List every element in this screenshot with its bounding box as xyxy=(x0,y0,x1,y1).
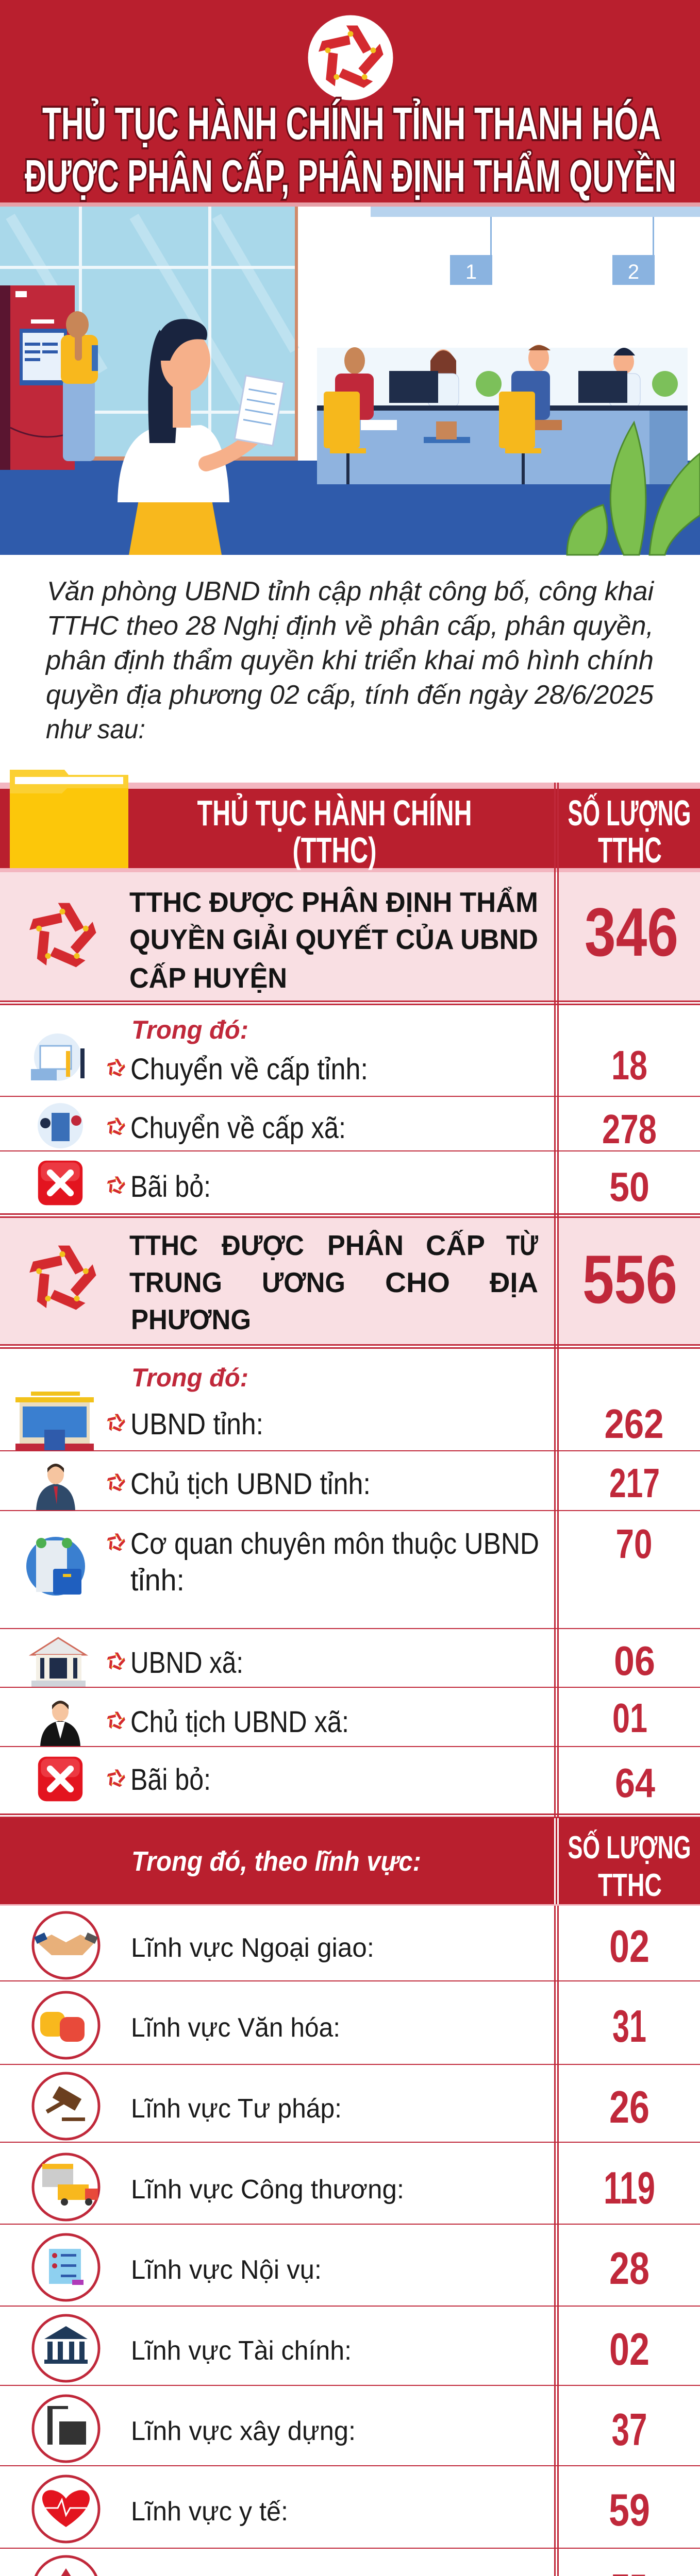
icon: recycle xyxy=(42,2568,90,2576)
panel: sub-rows of 556: UBND xã: xyxy=(130,1646,243,1680)
panel: sub-rows of 556: Chủ tịch UBND tỉnh: xyxy=(130,1467,371,1501)
row: Khoa học và Công nghệ xyxy=(42,2565,647,2576)
row: Văn hóa: Lĩnh vực Văn hóa: xyxy=(131,2013,340,2043)
illustration: public service office xyxy=(0,207,700,555)
panel: sub-rows of 556: 64 xyxy=(615,1760,655,1806)
panel: row 346 xyxy=(0,872,700,1001)
icon: gavel xyxy=(46,2086,85,2121)
icon: construction xyxy=(47,2406,86,2445)
icon: chairman xyxy=(36,1464,75,1511)
table header xyxy=(0,770,700,872)
intro paragraph: Văn phòng UBND tỉnh cập nhật công bố, công khai xyxy=(47,577,654,606)
heading: CẤP xyxy=(426,1229,485,1261)
panel: sub-rows of 346 xyxy=(0,1015,700,1210)
panel: sub-rows of 556: 262 xyxy=(604,1401,664,1447)
icon: heart xyxy=(42,2490,90,2527)
icon: commune chairman xyxy=(40,1701,80,1747)
vertical divider xyxy=(554,783,559,2576)
heading: TTHC ĐƯỢC PHÂN ĐỊNH THẨM xyxy=(129,886,538,918)
plant xyxy=(567,422,700,555)
heading: ĐƯỢC xyxy=(222,1229,304,1261)
row: Ngoại giao xyxy=(34,1921,649,1972)
header banner xyxy=(0,0,700,207)
counter signs: 2 xyxy=(628,261,639,283)
row: Nội vụ: Lĩnh vực Nội vụ: xyxy=(131,2255,322,2285)
heading xyxy=(129,886,538,994)
panel: sub-rows of 556: 06 xyxy=(614,1638,655,1684)
row: Tài chính: Lĩnh vực Tài chính: xyxy=(131,2336,352,2366)
panel: sub-rows of 346: 278 xyxy=(602,1106,657,1152)
panel: sub-rows of 346: Bãi bỏ: xyxy=(130,1170,211,1204)
panel: sub-rows of 556 xyxy=(0,1363,700,1806)
row: Tư pháp xyxy=(46,2081,649,2132)
intro paragraph: TTHC theo 28 Nghị định về phân cấp, phân quyền, xyxy=(47,611,654,641)
panel: sub-rows of 346: Chuyển về cấp xã: xyxy=(130,1111,346,1145)
header label: THỦ TỤC HÀNH CHÍNH xyxy=(197,792,472,833)
row: y tế xyxy=(42,2484,650,2535)
icon: provincial building xyxy=(15,1392,94,1451)
row: Tư pháp: 26 xyxy=(609,2081,649,2132)
row: Công thương: 119 xyxy=(604,2162,655,2213)
ATM xyxy=(0,285,75,470)
row: Ngoại giao: Lĩnh vực Ngoại giao: xyxy=(131,1933,374,1963)
icon: office workers xyxy=(38,1103,83,1148)
icon: people documents xyxy=(31,1033,85,1081)
icon: commune building xyxy=(31,1638,86,1687)
section header: by field xyxy=(0,1818,700,1906)
row: Văn hóa: 31 xyxy=(612,2001,646,2052)
header label: (TTHC) xyxy=(293,830,376,870)
heading xyxy=(129,1229,538,1335)
row: y tế: 59 xyxy=(609,2484,650,2535)
panel: sub-rows of 346: Chuyển về cấp tỉnh: xyxy=(130,1053,368,1086)
panel: sub-rows of 556: Trong đó: xyxy=(131,1363,248,1392)
panel: sub-rows of 346: Trong đó: xyxy=(131,1015,248,1044)
header label xyxy=(197,792,472,870)
section header: by field: TTHC xyxy=(598,1868,662,1903)
heading: TTHC xyxy=(129,1229,198,1261)
row: xây dựng: 37 xyxy=(611,2404,647,2455)
icon: logo xyxy=(25,903,101,976)
header count label xyxy=(568,792,691,870)
logo circle xyxy=(307,14,394,101)
heading: PHƯƠNG xyxy=(131,1303,251,1335)
intro paragraph: như sau: xyxy=(46,715,145,744)
icon: shop truck xyxy=(42,2164,98,2206)
section header: by field: Trong đó, theo lĩnh vực: xyxy=(131,1846,421,1877)
intro paragraph xyxy=(45,577,654,744)
heading: TRUNG xyxy=(129,1266,222,1298)
row: Văn hóa xyxy=(40,2001,646,2052)
panel: sub-rows of 556: Bãi bỏ: xyxy=(130,1763,211,1797)
heading: ĐỊA xyxy=(490,1266,538,1298)
heading: CẤP HUYỆN xyxy=(129,962,287,994)
icon: logo xyxy=(25,1246,101,1318)
heading: CHO xyxy=(385,1266,450,1298)
row: xây dựng: Lĩnh vực xây dựng: xyxy=(131,2416,356,2446)
counter signs xyxy=(450,217,655,285)
icon: red X xyxy=(38,1161,82,1205)
panel: sub-rows of 556: Chủ tịch UBND xã: xyxy=(130,1705,349,1739)
row: Ngoại giao: 02 xyxy=(609,1921,649,1972)
row: Công thương xyxy=(42,2162,655,2213)
panel: sub-rows of 556: 70 xyxy=(615,1521,653,1567)
panel: sub-rows of 556: Cơ quan chuyên môn thuộc UBND xyxy=(130,1527,539,1561)
main woman with document xyxy=(118,319,284,555)
icon: profile board xyxy=(49,2249,84,2285)
intro paragraph: quyền địa phương 02 cấp, tính đến ngày 28/6/2025 xyxy=(46,680,654,710)
heading: ƯƠNG xyxy=(262,1266,345,1298)
panel: sub-rows of 346: 50 xyxy=(609,1164,649,1210)
icon: agency building xyxy=(26,1537,85,1596)
panel: field rows xyxy=(0,1912,700,2576)
row: Tài chính xyxy=(44,2324,649,2375)
icon: masks xyxy=(40,2012,85,2042)
title xyxy=(25,98,676,201)
icon: red X xyxy=(38,1757,82,1801)
counter signs: 1 xyxy=(465,261,477,283)
row: Công thương: Lĩnh vực Công thương: xyxy=(131,2175,404,2205)
woman at ATM xyxy=(61,311,98,461)
icon: bank xyxy=(44,2326,88,2364)
row: xây dựng xyxy=(47,2404,647,2455)
row: y tế: Lĩnh vực y tế: xyxy=(131,2497,288,2527)
heading: QUYỀN GIẢI QUYẾT CỦA UBND xyxy=(129,923,538,955)
number: 346 xyxy=(585,894,678,971)
heading: PHÂN xyxy=(327,1229,404,1261)
icon: folder xyxy=(10,770,128,868)
icon: handshake xyxy=(34,1933,98,1955)
row: Nội vụ xyxy=(49,2243,649,2294)
row: Tư pháp: Lĩnh vực Tư pháp: xyxy=(131,2094,342,2124)
service counter with staff xyxy=(317,345,688,484)
panel: row 556 xyxy=(0,1218,700,1344)
intro paragraph: phân định thẩm quyền khi triển khai mô hình chính xyxy=(45,646,654,675)
panel: sub-rows of 556: 217 xyxy=(609,1460,660,1506)
heading: TỪ xyxy=(506,1229,538,1261)
row: Tài chính: 02 xyxy=(609,2324,649,2375)
panel: sub-rows of 346: 18 xyxy=(611,1042,647,1088)
panel: sub-rows of 556: UBND tỉnh: xyxy=(130,1408,263,1441)
row: Nội vụ: 28 xyxy=(609,2243,649,2294)
header count label: TTHC xyxy=(598,830,662,870)
panel: sub-rows of 556: tỉnh: xyxy=(130,1564,185,1597)
panel: sub-rows of 556: 01 xyxy=(612,1695,647,1741)
number: 556 xyxy=(582,1242,677,1318)
